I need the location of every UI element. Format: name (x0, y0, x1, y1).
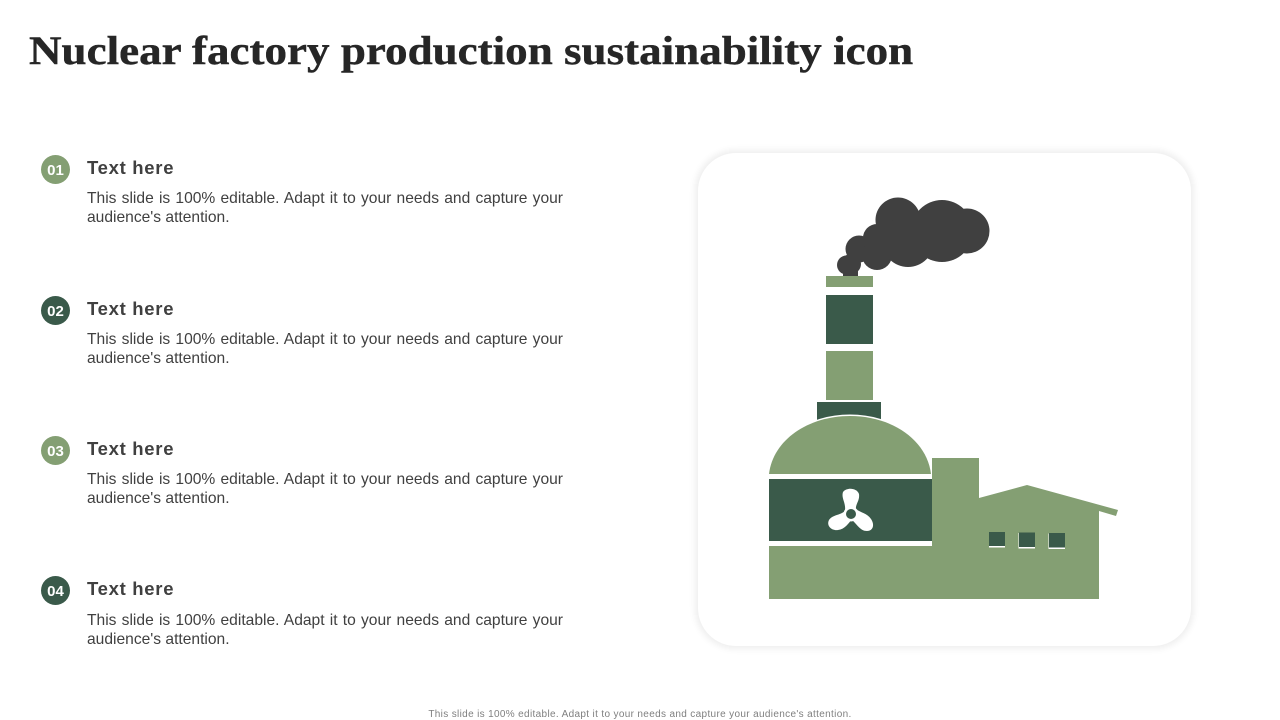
reactor dome (769, 416, 931, 474)
list item 02 (41, 296, 563, 367)
footer note: This slide is 100% editable. Adapt it to your needs and capture your audience's attention. (428, 709, 852, 720)
body text 04: This slide is 100% editable. Adapt it to your needs and capture your audience's attention. (87, 612, 563, 648)
badge 03 (41, 436, 70, 465)
badge 01: 01 (47, 162, 64, 179)
badge 02 (41, 296, 70, 325)
heading 04: Text here (87, 578, 174, 599)
heading 01: Text here (87, 157, 174, 178)
body text 01: This slide is 100% editable. Adapt it to your needs and capture your audience's attention. (87, 190, 563, 226)
list item 04 (41, 576, 563, 648)
badge 03: 03 (47, 443, 64, 460)
list item 03 (41, 436, 563, 507)
badge 02: 02 (47, 303, 64, 320)
reactor band (769, 479, 932, 541)
chimney (817, 276, 881, 422)
panel: icon card (698, 153, 1191, 646)
windows (989, 532, 1065, 549)
body text 03: This slide is 100% editable. Adapt it to your needs and capture your audience's attention. (87, 471, 563, 507)
badge 01 (41, 155, 70, 184)
badge 04 (41, 576, 70, 605)
title: Nuclear factory production sustainability icon (29, 28, 913, 73)
fan icon (828, 489, 873, 531)
heading 02: Text here (87, 298, 174, 319)
body text 02: This slide is 100% editable. Adapt it to your needs and capture your audience's attention. (87, 331, 563, 367)
list item 01 (41, 155, 563, 226)
smoke cloud (837, 198, 990, 276)
badge 04: 04 (47, 583, 64, 600)
factory building (769, 458, 1118, 599)
heading 03: Text here (87, 438, 174, 459)
